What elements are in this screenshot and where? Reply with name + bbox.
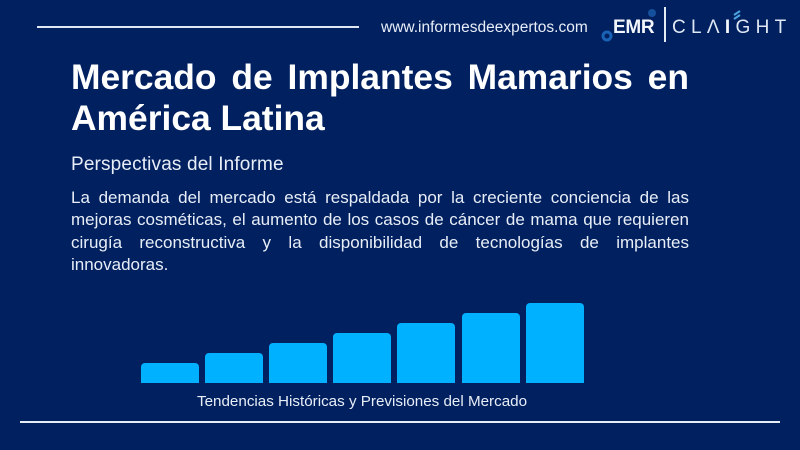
bar 6 xyxy=(462,313,520,383)
bar 4 xyxy=(333,333,391,383)
logo: EMR and Claight xyxy=(602,7,792,42)
subtitle: Perspectivas del Informe xyxy=(71,154,284,175)
bar 2 xyxy=(205,353,263,383)
logo text: Claight: CLΛIGHT xyxy=(672,17,792,38)
bar 1 xyxy=(141,363,199,383)
description paragraph: cirugía reconstructiva y la disponibilidad de tecnologías de implantes xyxy=(71,233,689,252)
description paragraph: La demanda del mercado está respaldada por la creciente conciencia de las xyxy=(71,188,689,207)
bar 3 xyxy=(269,343,327,383)
logo icon: dots xyxy=(602,9,740,42)
footer rule xyxy=(20,421,780,423)
bar chart xyxy=(141,303,584,383)
website url: www.informesdeexpertos.com xyxy=(381,19,588,36)
logo text: EMR: EMR xyxy=(613,17,654,38)
description paragraph: innovadoras. xyxy=(71,255,168,274)
header rule xyxy=(37,26,359,28)
title: América Latina xyxy=(71,98,325,138)
logo divider xyxy=(664,7,666,42)
bar 5 xyxy=(397,323,455,383)
title: Mercado de Implantes Mamarios en xyxy=(71,57,689,97)
title xyxy=(71,57,689,138)
description paragraph xyxy=(71,188,689,274)
chart caption: Tendencias Históricas y Previsiones del Mercado xyxy=(197,393,527,410)
description paragraph: mejoras cosméticas, el aumento de los casos de cáncer de mama que requieren xyxy=(71,210,689,229)
bar 7 xyxy=(526,303,584,383)
